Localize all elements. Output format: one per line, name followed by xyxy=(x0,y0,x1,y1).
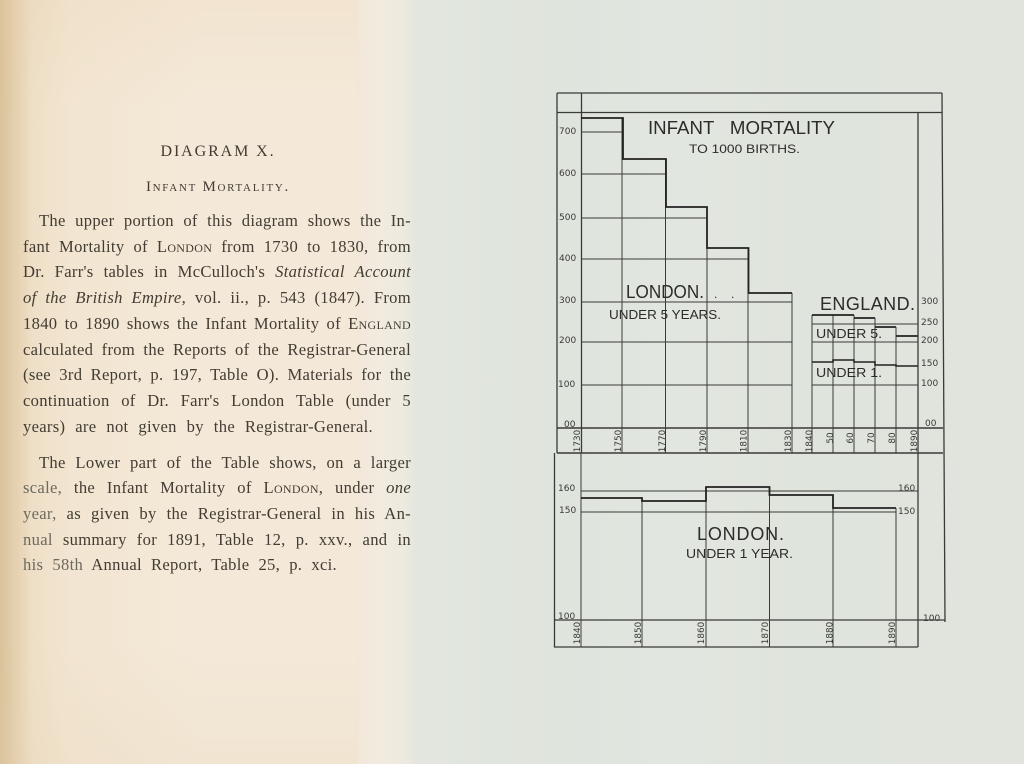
paragraph 1: (see 3rd Report, p. 197, Table O). Materials for the xyxy=(23,364,411,384)
upper x axis years: 1730 xyxy=(573,429,583,452)
paragraph 1 xyxy=(23,210,412,436)
left scale upper: 600 xyxy=(559,169,576,179)
paragraph 1: fant Mortality of London from 1730 to 1830, from xyxy=(23,236,411,256)
paragraph 2 xyxy=(23,452,411,574)
upper x axis years: 1840 xyxy=(805,429,815,452)
label: dot: . xyxy=(714,287,717,301)
paragraph 2: year, as given by the Registrar-General in his An- xyxy=(23,504,411,522)
right scale lower xyxy=(898,484,940,624)
upper x axis years: 1830 xyxy=(784,429,794,452)
paragraph 2: his 58th Annual Report, Table 25, p. xci. xyxy=(23,554,337,574)
lower x axis years: 1860 xyxy=(697,621,707,644)
upper x axis years: 80 xyxy=(888,432,898,444)
paragraph 1: years) are not given by the Registrar-General. xyxy=(23,416,373,436)
right scale upper: 300 xyxy=(921,297,938,307)
right scale upper: 250 xyxy=(921,318,938,328)
upper chart frame and grid xyxy=(557,93,945,647)
paragraph 2: The Lower part of the Table shows, on a larger xyxy=(39,452,411,472)
upper x axis years: 1890 xyxy=(910,429,920,452)
upper x axis years: 1770 xyxy=(658,429,668,452)
label: under 1 year: UNDER 1 YEAR. xyxy=(686,547,793,561)
lower x axis years: 1880 xyxy=(826,621,836,644)
label: under 1: UNDER 1. xyxy=(816,366,882,380)
lower x axis years xyxy=(573,621,898,644)
paragraph 2: nual summary for 1891, Table 12, p. xxv., and in xyxy=(23,530,411,548)
lower x axis years: 1870 xyxy=(761,621,771,644)
upper x axis years: 1810 xyxy=(740,429,750,452)
label: under 5: UNDER 5. xyxy=(816,327,882,341)
left scale upper: 400 xyxy=(559,254,576,264)
upper x axis years: 50 xyxy=(826,432,836,444)
lower x axis years: 1890 xyxy=(888,621,898,644)
left scale upper: 00 xyxy=(564,420,576,430)
paragraph 1: The upper portion of this diagram shows the In- xyxy=(39,210,411,230)
left scale upper xyxy=(558,127,576,430)
paragraph 1: Dr. Farr's tables in McCulloch's Statistical Account xyxy=(23,262,411,280)
left scale upper: 300 xyxy=(559,296,576,306)
right scale upper: 00 xyxy=(925,419,937,429)
left scale upper: 700 xyxy=(559,127,576,137)
right scale lower: 150 xyxy=(898,507,915,517)
right scale lower: 100 xyxy=(923,614,940,624)
upper x axis years xyxy=(573,429,920,452)
chart subtitle: TO 1000 BIRTHS. xyxy=(689,142,800,156)
right scale upper: 100 xyxy=(921,379,938,389)
upper x axis years: 60 xyxy=(846,432,856,444)
left scale lower: 160 xyxy=(558,484,575,494)
right scale lower: 160 xyxy=(898,484,915,494)
chart title: INFANT MORTALITY xyxy=(648,118,835,138)
left scale lower: 100 xyxy=(558,612,575,622)
London under 5 years step line xyxy=(581,118,792,293)
paragraph 2: scale, the Infant Mortality of London, under one xyxy=(23,478,411,496)
England under 1 step line xyxy=(812,360,918,366)
right scale upper: 200 xyxy=(921,336,938,346)
label: dot: . xyxy=(731,287,734,301)
paragraph 1: of the British Empire, vol. ii., p. 543 (1847). From xyxy=(23,288,411,306)
upper x axis years: 70 xyxy=(867,432,877,444)
lower x axis years: 1850 xyxy=(634,621,644,644)
label: England: ENGLAND. xyxy=(820,294,915,314)
label: under 5 years: UNDER 5 YEARS. xyxy=(609,308,721,322)
lower chart frame and grid xyxy=(554,453,946,647)
right scale upper xyxy=(921,297,938,429)
lower x axis years: 1840 xyxy=(573,621,583,644)
label: lower London: LONDON. xyxy=(697,524,784,544)
right scale upper: 150 xyxy=(921,359,938,369)
text panel: description xyxy=(23,143,412,574)
left scale upper: 100 xyxy=(558,380,575,390)
paragraph 1: 1840 to 1890 shows the Infant Mortality of England xyxy=(23,314,411,332)
paragraph 1: continuation of Dr. Farr's London Table (under 5 xyxy=(23,390,411,410)
London under 1 year step line xyxy=(581,487,896,508)
left scale lower: 150 xyxy=(559,506,576,516)
upper x axis years: 1750 xyxy=(614,429,624,452)
upper x axis years: 1790 xyxy=(699,429,709,452)
page shading xyxy=(0,0,358,764)
left scale upper: 200 xyxy=(559,336,576,346)
left scale lower xyxy=(558,484,576,622)
label: London: LONDON. xyxy=(626,282,704,302)
heading: Diagram X: DIAGRAM X. xyxy=(160,143,276,160)
subheading: Infant Mortality: Infant Mortality. xyxy=(146,179,290,195)
paragraph 1: calculated from the Reports of the Registrar-General xyxy=(23,340,411,358)
England under 5 step line xyxy=(812,315,918,336)
left scale upper: 500 xyxy=(559,213,576,223)
